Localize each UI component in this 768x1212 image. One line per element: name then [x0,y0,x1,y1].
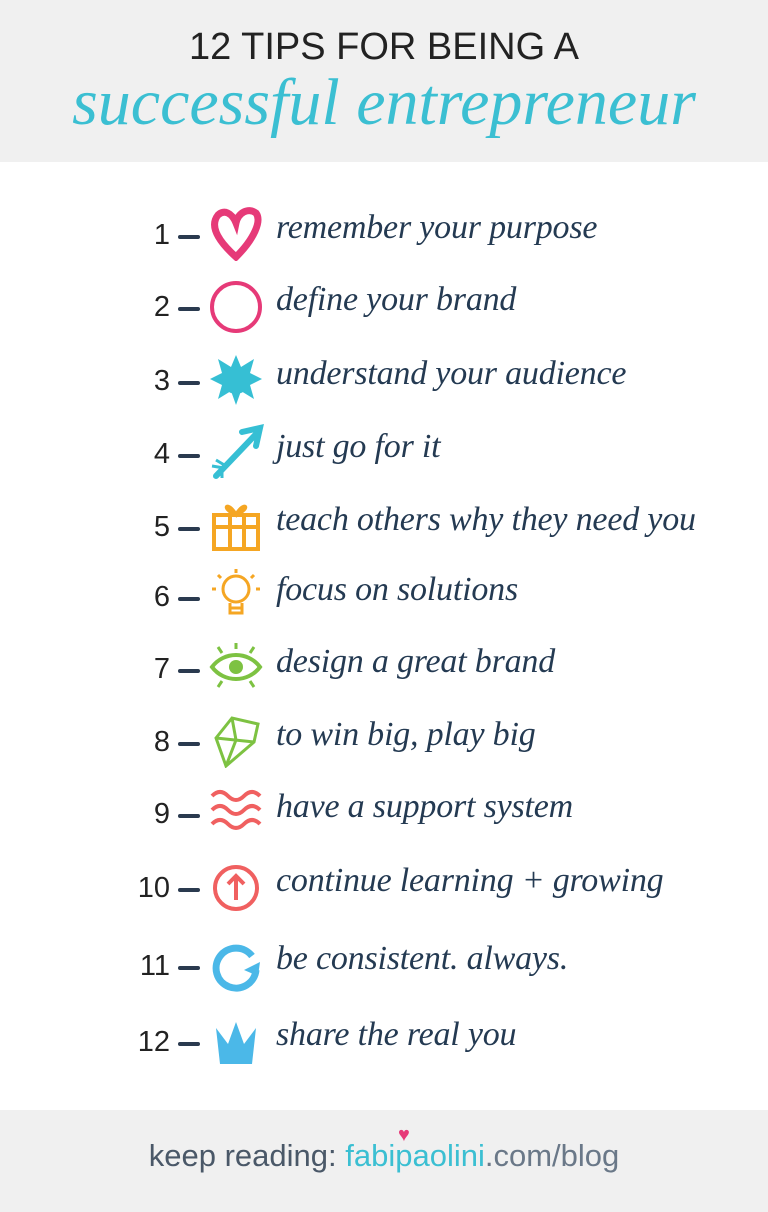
tip 8: 8 [154,726,170,758]
tip 4 [154,424,442,479]
icon: splat [210,355,262,405]
tip 7 [154,643,556,688]
title: successful entrepreneur [72,66,696,139]
tip 7: design a great brand [276,643,555,680]
tip 10: 10 [138,872,170,904]
tip 10: continue learning + growing [276,862,663,899]
tip 12: share the real you [276,1016,516,1053]
tip 2: 2 [154,291,170,323]
tip 9: have a support system [276,788,573,825]
tip 11 [140,940,568,992]
title: 12 TIPS FOR BEING A [189,26,579,68]
tip 10 [138,862,663,911]
tip 2 [154,281,516,333]
icon: heart [211,207,262,261]
tip 6 [154,569,518,614]
tip 3: 3 [154,365,170,397]
tip 4: 4 [154,438,170,470]
icon: refresh [212,944,260,992]
tip 7: 7 [154,653,170,685]
tip 2: define your brand [276,281,516,318]
footer background [0,1110,768,1212]
title [72,26,696,139]
tip 3 [154,355,626,405]
tip 11: be consistent. always. [276,940,568,977]
footer link: keep reading: fabipaolini.com/blog [149,1138,619,1173]
tip 1: remember your purpose [276,209,597,246]
tip 1: 1 [154,219,170,251]
icon: waves [210,790,262,830]
tip 11: 11 [140,950,170,982]
tip 9 [154,788,573,830]
tip 12 [138,1016,516,1064]
icon: crown [216,1022,256,1064]
icon: diamond [214,716,260,768]
tip 12: 12 [138,1026,170,1058]
tip 4: just go for it [276,428,440,465]
header background [0,0,768,162]
tip 6: focus on solutions [276,571,518,608]
icon: up arrow circle [213,865,259,911]
icon: light bulb [212,569,260,614]
tip 5: teach others why they need you [276,501,696,538]
tip 1 [154,207,597,261]
icon: arrow [212,424,264,479]
tip 5: 5 [154,511,170,543]
icon: eye [210,643,262,688]
icon: gift [212,504,260,551]
tip 3: understand your audience [276,355,626,392]
footer heart: ♥ [398,1124,410,1146]
tip 6: 6 [154,581,170,613]
icon: circle [210,281,262,333]
tip 8: to win big, play big [276,716,536,753]
tip 5 [154,501,696,551]
tip 9: 9 [154,798,170,830]
tip 8 [154,716,536,768]
